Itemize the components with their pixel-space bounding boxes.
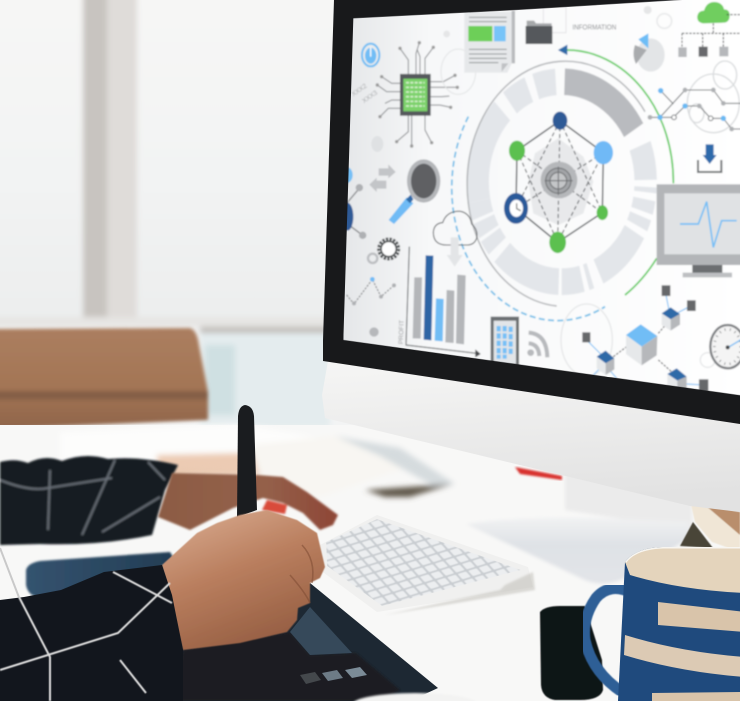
icon: power button xyxy=(362,44,379,66)
cable xyxy=(0,548,20,600)
line network graph xyxy=(648,61,740,133)
icon: heartbeat monitor xyxy=(657,184,740,277)
label: xxx: XXX3 xyxy=(361,89,379,105)
small cube top xyxy=(662,307,680,331)
monitor bezel xyxy=(323,0,740,424)
upper sleeve xyxy=(0,456,178,545)
desk xyxy=(0,425,740,701)
chair xyxy=(0,328,208,429)
small line chart xyxy=(347,277,396,305)
lower sleeve xyxy=(0,565,183,701)
ring arcs xyxy=(452,45,673,321)
left molecule icon xyxy=(341,167,366,239)
pen xyxy=(237,405,257,517)
gear icon xyxy=(368,239,399,263)
large cube xyxy=(626,324,657,365)
document icon xyxy=(464,11,515,73)
black cap xyxy=(540,606,603,700)
faint circle near chip xyxy=(441,49,476,94)
decorative circles top xyxy=(371,6,672,152)
lower hand xyxy=(162,510,325,650)
cube network xyxy=(561,285,708,392)
label: information: INFORMATION xyxy=(572,24,616,31)
tablet body xyxy=(175,583,438,701)
book behind monitor xyxy=(680,500,740,552)
gauge clock xyxy=(700,325,740,368)
upper hand xyxy=(158,473,338,530)
window background xyxy=(0,0,740,440)
icon: microchip xyxy=(376,41,459,148)
small cube left xyxy=(597,351,614,375)
exchange arrows xyxy=(369,164,396,192)
red pointer on desk xyxy=(515,467,562,480)
label: xxx xyxy=(352,83,378,103)
small cube bottom xyxy=(667,368,687,392)
monitor chin xyxy=(322,350,740,512)
outline cloud with arrow xyxy=(433,211,477,267)
magnifier xyxy=(389,159,440,224)
blurred papers on desk xyxy=(60,424,455,497)
bar chart xyxy=(398,247,481,357)
tablet top xyxy=(26,552,200,600)
folder icon xyxy=(526,7,566,44)
icon: green cloud hierarchy xyxy=(678,2,740,57)
decorative dot lower left xyxy=(369,327,379,337)
shirt cuff at bottom xyxy=(353,693,477,701)
rss icon xyxy=(527,333,547,357)
screen xyxy=(340,0,740,400)
label: xxx: XXX2 xyxy=(350,83,369,98)
pie chart xyxy=(634,33,665,72)
icon: download xyxy=(698,144,721,172)
monitor stand and base xyxy=(466,470,692,584)
bar chart: PROFIT xyxy=(398,320,406,344)
wedge ring xyxy=(468,68,657,295)
mug handle xyxy=(584,589,632,692)
tablet active area xyxy=(290,607,352,655)
keyboard xyxy=(320,515,535,615)
tablet shaded lower area xyxy=(175,632,400,701)
hexagon network xyxy=(504,112,613,253)
tablet buttons xyxy=(300,667,367,684)
phone building icon xyxy=(491,317,519,367)
screen background xyxy=(340,0,740,400)
mug xyxy=(584,540,740,701)
mug body xyxy=(615,540,740,701)
